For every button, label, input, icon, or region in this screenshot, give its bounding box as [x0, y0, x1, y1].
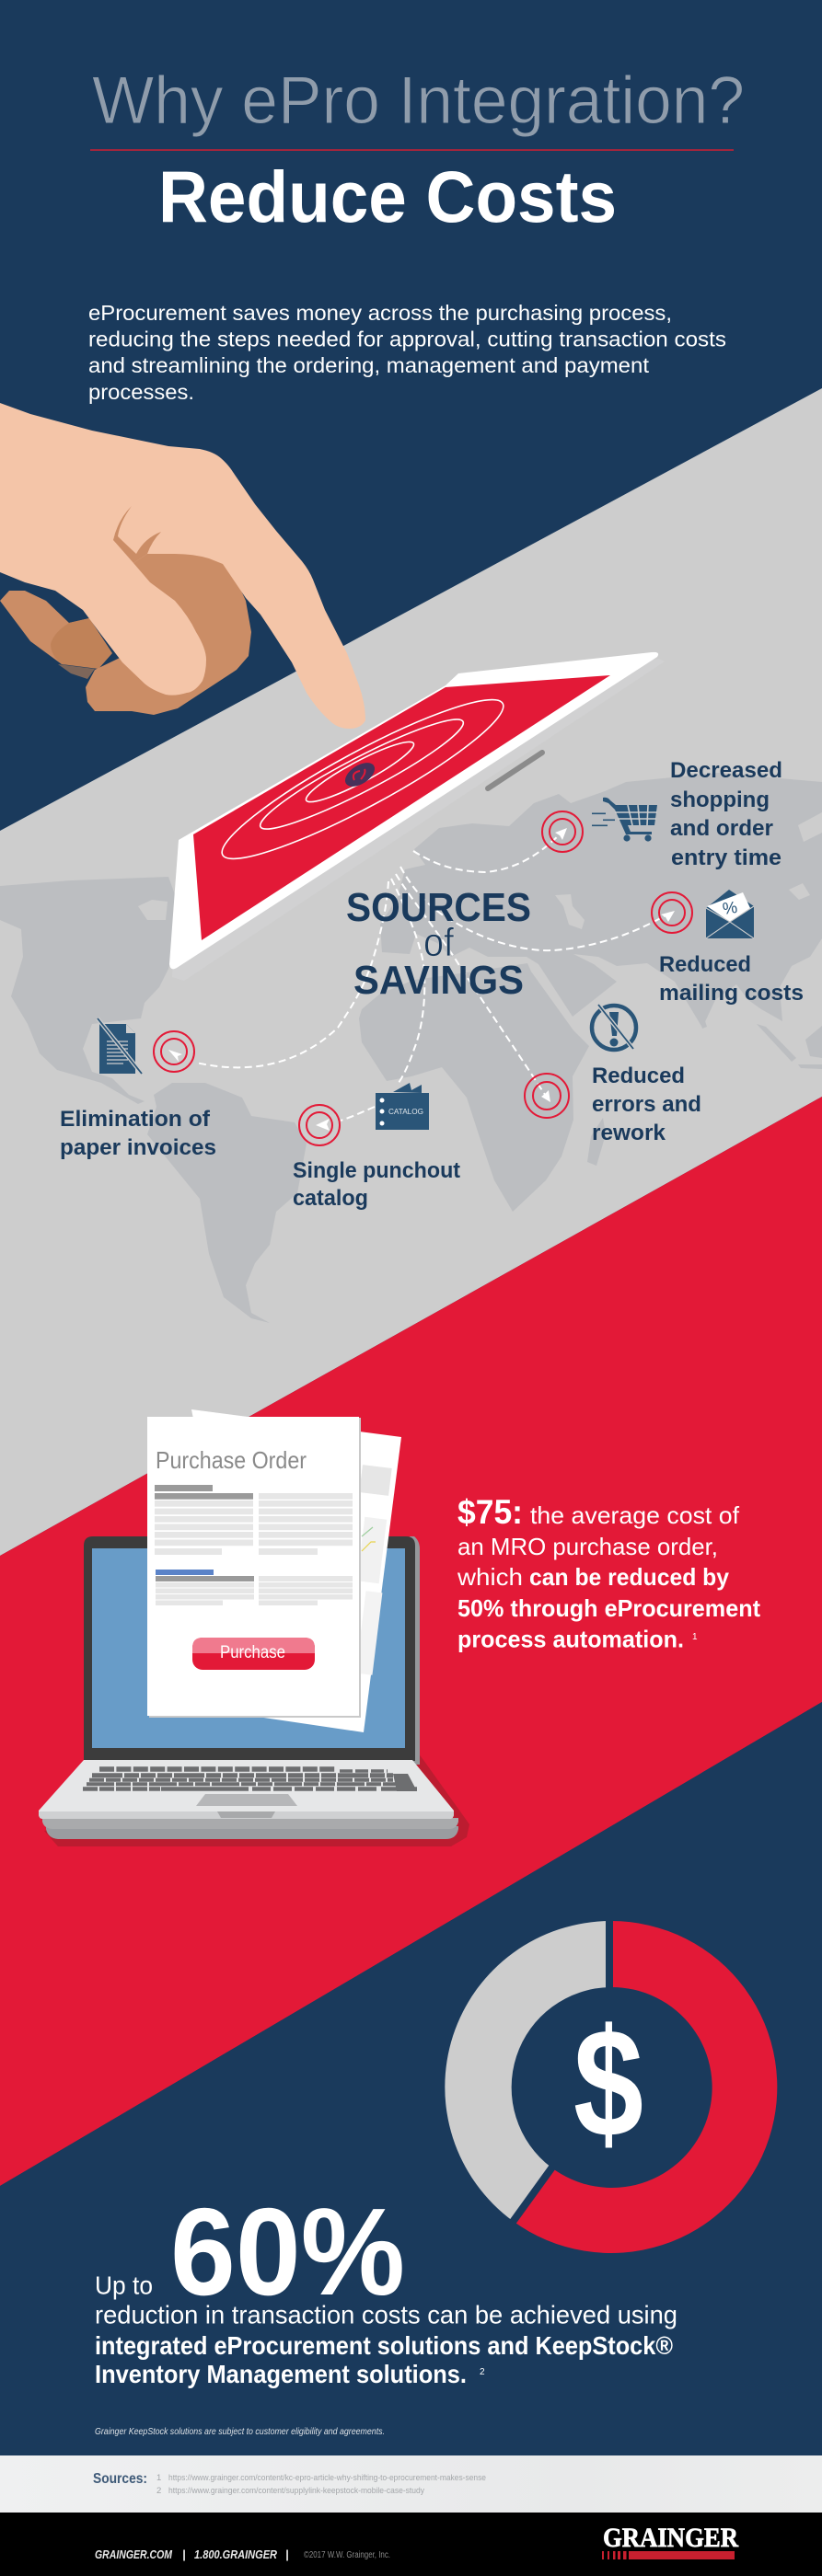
hand: palm and index finger — [0, 403, 365, 729]
label: reduced errors: Reduced — [592, 1064, 685, 1088]
subtitle: Reduce Costs — [158, 155, 617, 237]
label: decreased shopping: shopping — [670, 788, 770, 812]
callout: $75 purchase order cost: can be reduced by — [529, 1563, 730, 1591]
callout: $75 purchase order cost: process automation. — [457, 1625, 684, 1652]
label: reduced mailing costs: mailing costs — [659, 981, 804, 1006]
source list: https://www.grainger.com/content/supplylink-keepstock-mobile-case-study — [168, 2486, 424, 2496]
icon: no errors — [592, 1005, 636, 1050]
label: single punchout catalog: catalog — [293, 1186, 368, 1211]
label: single punchout catalog: Single punchout — [293, 1158, 460, 1183]
background: red diagonal panel — [0, 1097, 822, 2186]
title: Why ePro Integration? — [92, 63, 745, 138]
target: errors — [525, 1074, 569, 1118]
callout: $75 purchase order cost: which — [457, 1563, 523, 1591]
heading: sources of savings — [346, 885, 531, 1003]
Grainger logo: GRAINGER — [603, 2523, 738, 2553]
label: elimination of paper invoices — [60, 1107, 216, 1160]
map: Caspian Sea — [555, 894, 585, 929]
purchase button — [192, 1638, 315, 1670]
document: back sheet — [191, 1409, 401, 1732]
hand: back finger — [0, 591, 110, 667]
stat: 60 percent reduction: 60% — [170, 2182, 405, 2321]
footer bar — [0, 2513, 822, 2576]
map: Borneo — [805, 1026, 822, 1058]
screen target rings — [210, 679, 515, 880]
icon: crossed out paper invoice — [98, 1018, 142, 1074]
tablet — [169, 652, 665, 981]
heading: sources of savings: of — [423, 920, 455, 965]
icon: catalog: CATALOG — [388, 1108, 423, 1116]
tablet shadow — [172, 659, 665, 981]
background: gray diagonal panel — [0, 388, 822, 1556]
icon: catalog — [376, 1083, 429, 1130]
callout: $75 purchase order cost: 1 — [692, 1632, 698, 1642]
label: decreased shopping — [670, 758, 782, 870]
laptop front band — [39, 1811, 454, 1819]
hand: finger shadow — [58, 664, 95, 679]
target: paper invoices — [154, 1031, 194, 1072]
label: reduced errors: rework — [592, 1121, 666, 1145]
source list: 1 — [156, 2473, 161, 2483]
laptop trackpad — [196, 1794, 297, 1806]
icon: pointing hand — [0, 403, 365, 729]
label: single punchout catalog — [293, 1158, 460, 1211]
icon: envelope with percent: % — [722, 898, 738, 918]
stat: 60 percent reduction: 2 — [480, 2367, 485, 2377]
intro text block — [88, 301, 726, 404]
purchase order title: Purchase Order — [156, 1446, 307, 1474]
source list: 2 — [156, 2486, 161, 2496]
sources strip — [0, 2455, 822, 2513]
callout: $75 purchase order cost: the average cost of — [530, 1501, 740, 1529]
purchase button: Purchase — [220, 1643, 285, 1662]
laptop keyboard — [83, 1769, 417, 1791]
label: reduced errors: errors and — [592, 1092, 701, 1117]
map: Sumatra — [757, 1024, 796, 1062]
label: elimination of paper invoices: paper invoices — [60, 1135, 216, 1160]
laptop base middle — [42, 1818, 458, 1829]
intro text block: reducing the steps needed for approval, cutting transaction costs — [88, 328, 726, 351]
intro text block: and streamlining the ordering, management and payment — [88, 353, 649, 377]
document: purchase order sheet — [147, 1417, 361, 1718]
donut gaps — [606, 1914, 613, 1995]
map: North America — [0, 877, 184, 1104]
map: South America — [147, 1083, 307, 1323]
footer contact text: | — [285, 2547, 289, 2561]
label: decreased shopping: entry time — [671, 845, 781, 870]
laptop bezel — [84, 1536, 415, 1761]
label: elimination of paper invoices: Elimination of — [60, 1107, 211, 1132]
label: reduced errors — [592, 1064, 701, 1145]
heading: sources of savings: SAVINGS — [353, 958, 524, 1003]
intro text block: processes. — [88, 380, 194, 404]
map: Madagascar — [587, 1118, 606, 1166]
donut chart: 60 percent — [445, 1914, 777, 2253]
background: lower navy diagonal panel — [0, 1702, 822, 2455]
label: decreased shopping: Decreased — [670, 758, 782, 783]
donut: red 60% segment — [513, 1921, 777, 2253]
laptop side edge — [410, 1536, 420, 1765]
footer contact text: | — [182, 2547, 186, 2561]
stat: 60 percent reduction: reduction in transaction costs can be achieved using — [95, 2300, 677, 2329]
laptop base lower — [46, 1826, 458, 1839]
icon: shopping cart — [592, 798, 657, 842]
callout: $75 purchase order cost: an MRO purchase order, — [457, 1533, 718, 1560]
label: reduced mailing costs: Reduced — [659, 952, 751, 977]
stat: 60 percent reduction: Up to — [95, 2271, 153, 2300]
label: decreased shopping: and order — [670, 816, 773, 841]
map: Sri Lanka — [701, 1021, 707, 1029]
laptop red shadow — [44, 1748, 469, 1846]
laptop deck — [39, 1760, 454, 1819]
footer contact text: GRAINGER.COM — [95, 2547, 173, 2561]
sources heading: Sources: — [93, 2471, 147, 2487]
stat: 60 percent reduction: integrated eProcurement solutions and KeepStock® — [95, 2331, 673, 2360]
stat: 60 percent reduction — [95, 2182, 677, 2388]
donut dollar sign: $ — [573, 1996, 643, 2169]
form lines, second block — [156, 1570, 353, 1605]
hand: folded fingers — [86, 543, 251, 715]
target: shopping — [542, 811, 583, 852]
copyright: ©2017 W.W. Grainger, Inc. — [304, 2550, 390, 2560]
map: Eurasia — [380, 773, 822, 1028]
callout: $75 purchase order cost — [457, 1493, 760, 1652]
icon: envelope with percent — [706, 890, 754, 938]
icon: laptop — [39, 1536, 469, 1846]
target: catalog — [299, 1105, 340, 1145]
map: Sea of Japan — [798, 812, 822, 842]
hand: middle finger shade — [51, 618, 112, 669]
footer contact text — [95, 2547, 289, 2561]
form lines, first block — [155, 1485, 353, 1555]
target: mailing — [652, 892, 692, 933]
tablet home slot — [488, 753, 542, 788]
source list: https://www.grainger.com/content/kc-epro-article-why-shifting-to-eprocurement-makes-sense — [168, 2473, 486, 2483]
label: reduced mailing costs — [659, 952, 804, 1006]
footer contact text: 1.800.GRAINGER — [194, 2547, 278, 2561]
source list — [156, 2473, 486, 2496]
intro text block: eProcurement saves money across the purchasing process, — [88, 301, 672, 325]
heading: sources of savings: SOURCES — [346, 885, 531, 930]
callout: $75 purchase order cost: 50% through eProcurement — [457, 1594, 760, 1622]
laptop screen — [92, 1548, 405, 1748]
stat: 60 percent reduction: Inventory Management solutions. — [95, 2360, 467, 2388]
heading rule — [90, 149, 734, 151]
laptop notch — [217, 1811, 275, 1818]
callout: $75 purchase order cost: $75: — [457, 1493, 523, 1531]
world map — [0, 773, 822, 1323]
map: Korea coast — [789, 883, 810, 900]
tablet body — [169, 652, 658, 969]
disclaimer: Grainger KeepStock solutions are subject to customer eligibility and agreements. — [95, 2426, 385, 2437]
tablet screen — [193, 675, 610, 940]
screen center icon — [341, 758, 379, 791]
map: Hudson Bay — [138, 900, 168, 920]
hand: crease — [113, 506, 161, 563]
donut: gray remainder — [445, 1921, 610, 2221]
map: Java — [798, 1064, 822, 1069]
map: Africa — [359, 963, 589, 1212]
dashed connector lines — [196, 833, 670, 1121]
